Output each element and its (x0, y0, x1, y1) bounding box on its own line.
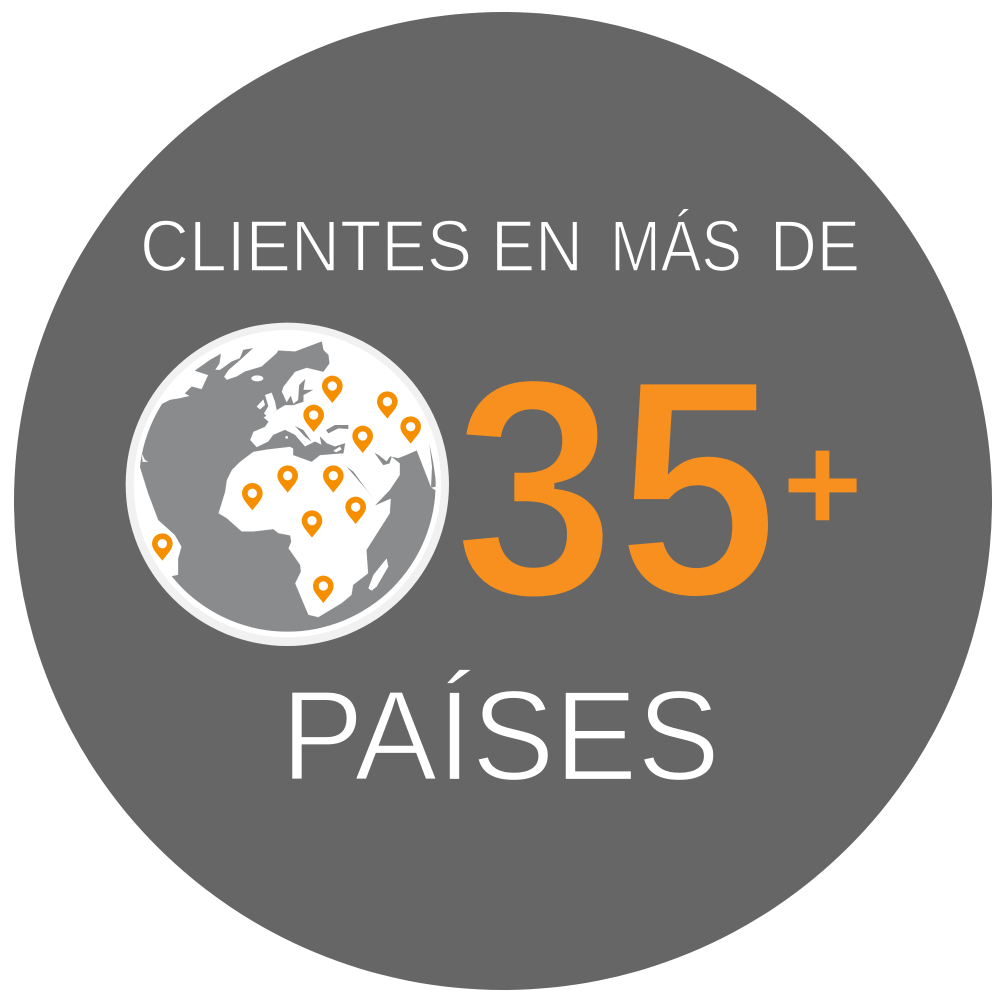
iceland (251, 375, 263, 381)
pin: east africa (345, 497, 366, 524)
arctic channel (429, 443, 437, 488)
world map (133, 342, 440, 640)
globe white disc (134, 330, 441, 637)
location pins (152, 376, 421, 603)
globe outer ring (126, 323, 449, 646)
big number 35: 35 (453, 315, 779, 663)
pin: south america (152, 533, 173, 561)
cyprus (333, 447, 342, 452)
red sea (346, 466, 374, 500)
pin: north africa west (277, 465, 298, 493)
pin: middle east (352, 426, 373, 453)
adriatic sea (295, 426, 312, 442)
land notch (142, 453, 148, 462)
pin: central asia (400, 416, 421, 444)
oceans (133, 342, 440, 640)
pin: russia north (322, 376, 343, 403)
label: países: PAÍSES (281, 665, 720, 808)
heading: clientes en más de: MÁS (610, 207, 742, 287)
heading: clientes en más de: EN (491, 207, 583, 287)
great britain (264, 393, 277, 416)
icon: globe with location pins (126, 323, 449, 646)
heading: clientes en más de: DE (770, 207, 860, 287)
plus sign: + (782, 405, 863, 562)
pin: central africa (302, 510, 322, 538)
pin: south africa (313, 576, 334, 603)
pin: west africa (242, 483, 263, 510)
black sea (326, 425, 348, 433)
pin: europe (303, 405, 324, 432)
white islands (142, 375, 388, 591)
heading: clientes en más de (140, 207, 860, 287)
heading: clientes en más de: CLIENTES (140, 207, 472, 287)
sardinia (285, 436, 288, 439)
pin: north africa east (323, 465, 344, 493)
madagascar (368, 558, 388, 591)
ireland (257, 399, 265, 409)
pin: russia central (377, 391, 398, 419)
